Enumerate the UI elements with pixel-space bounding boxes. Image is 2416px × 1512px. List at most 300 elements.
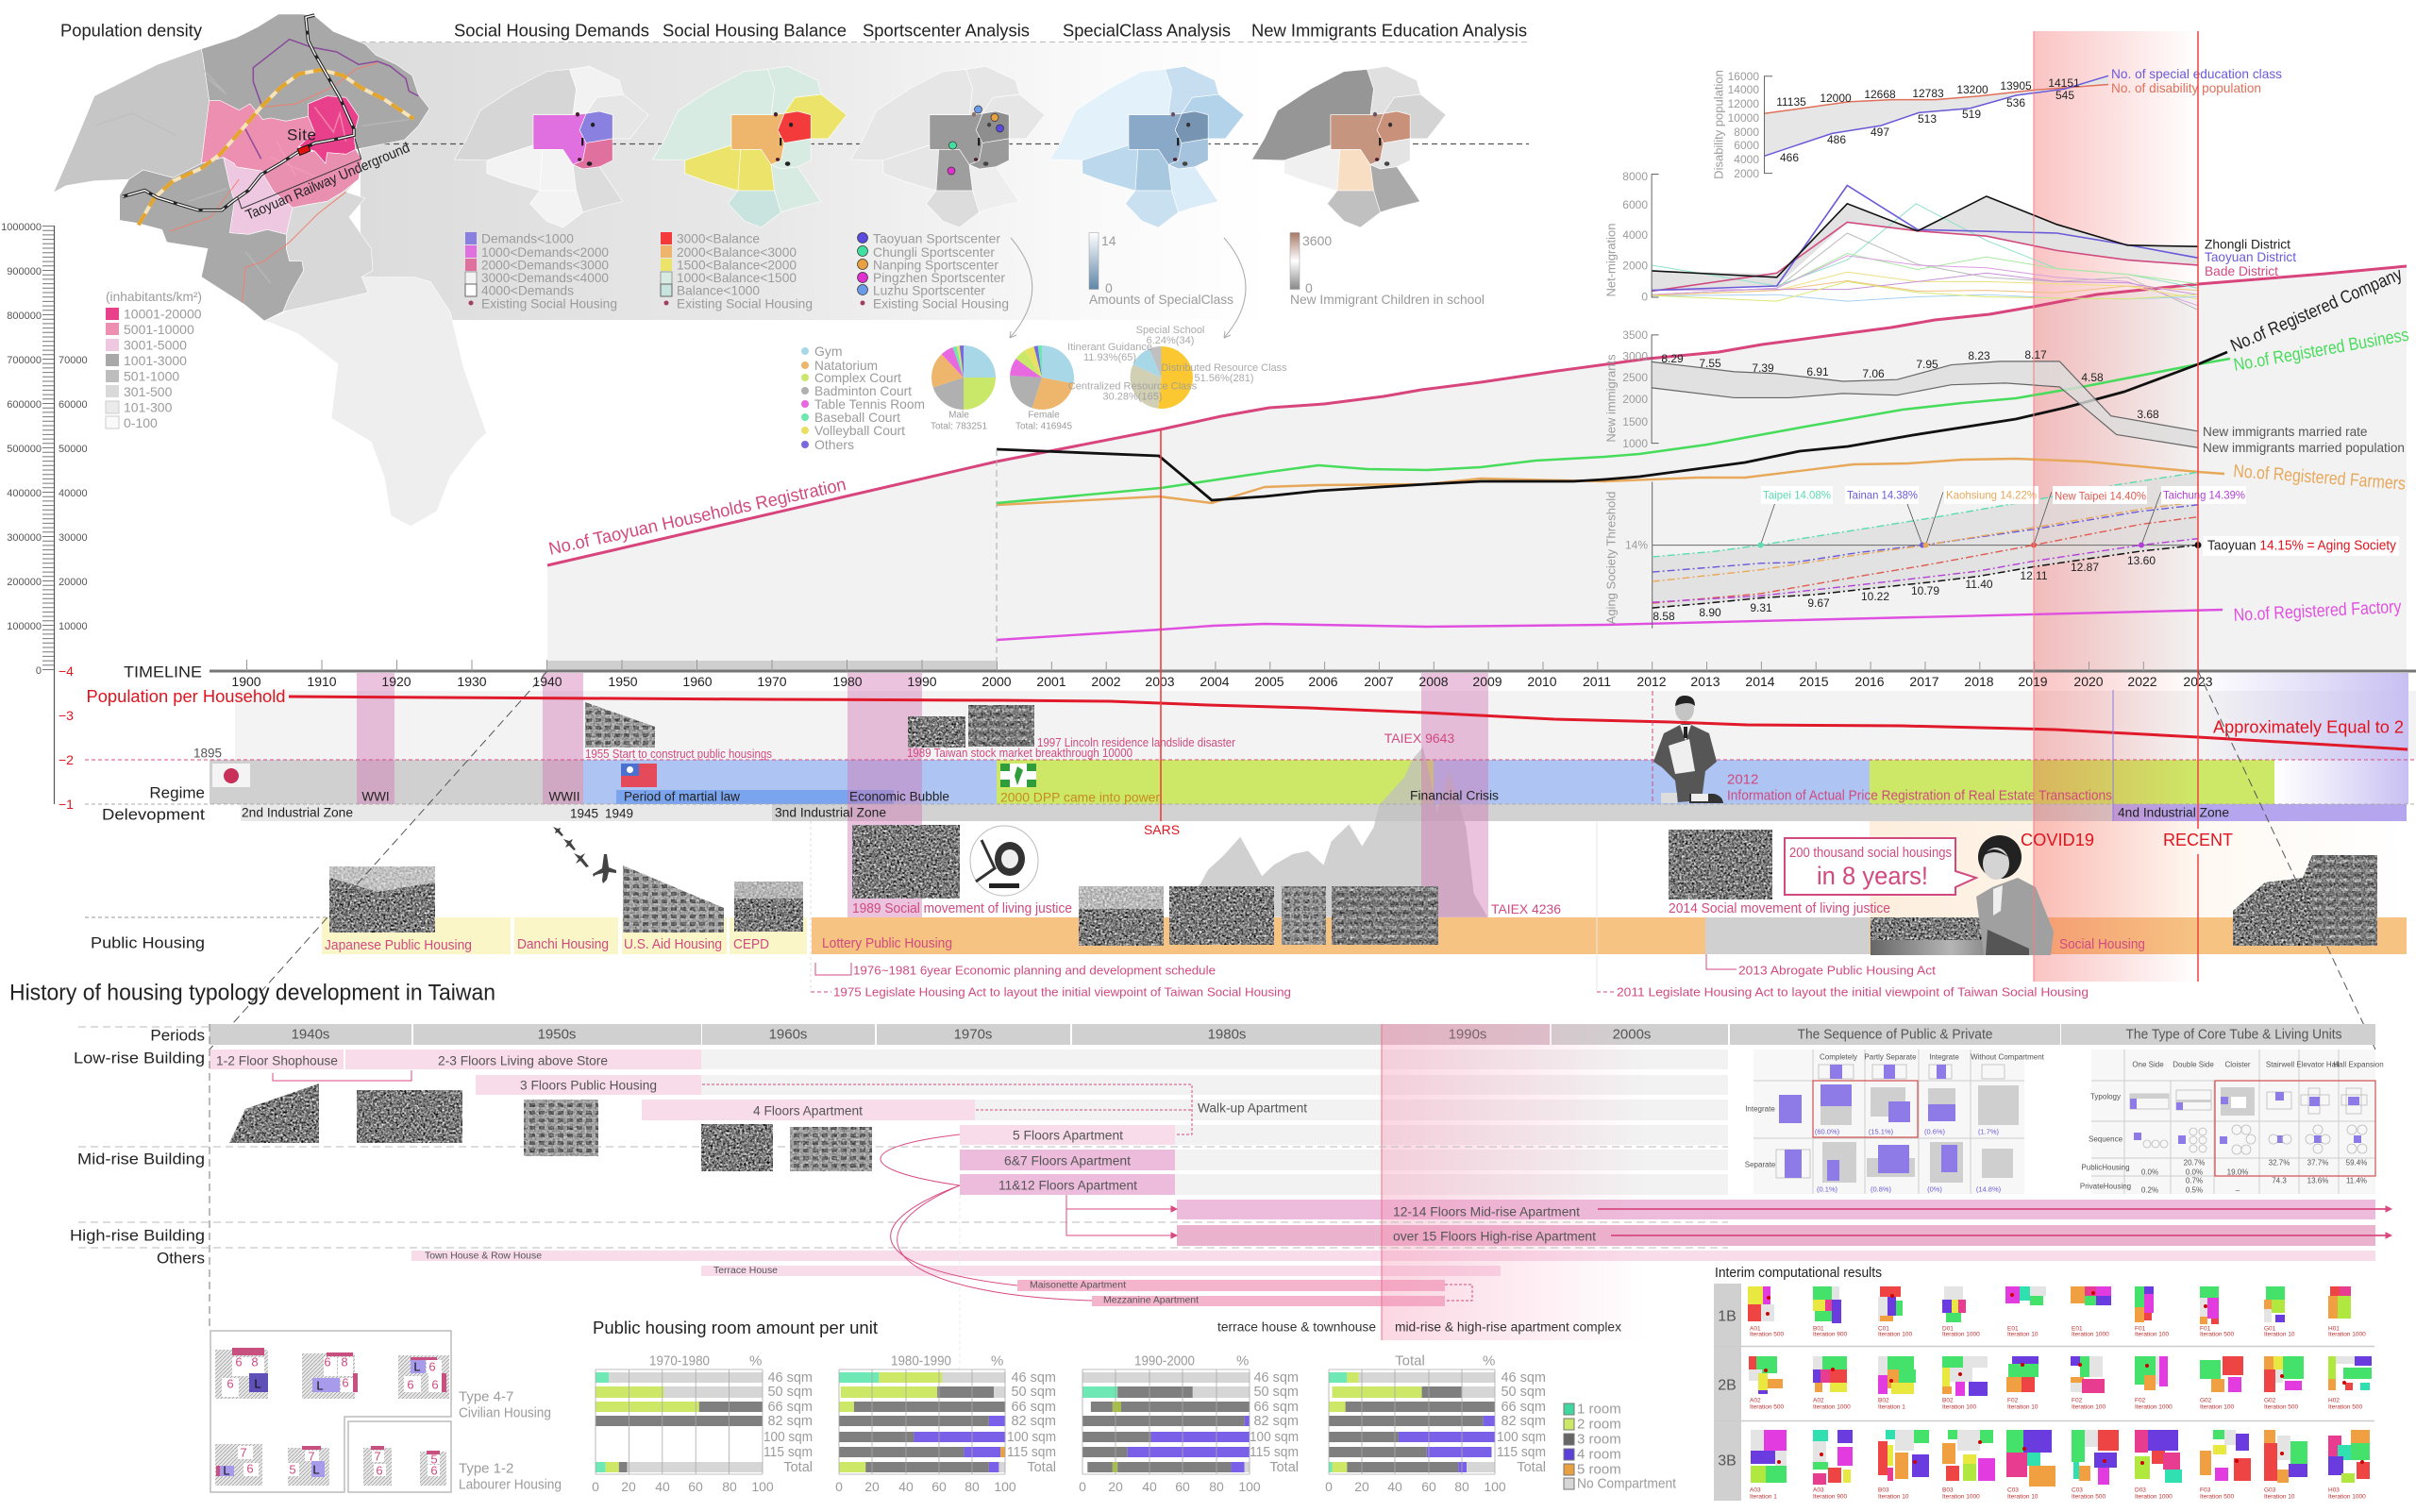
table: core tube and living units: 0.7% [2186,1176,2203,1185]
chart: aging society threshold: 10.79 [1911,584,1939,597]
row labels: Public Housing [91,934,205,951]
bar chart: total: 46 sqm [1501,1370,1546,1386]
public housing labels [325,901,2145,953]
left value axes: 40000 [59,488,88,499]
results captions: Iteration 1000 [1942,1493,1980,1501]
legend: demands [465,230,617,311]
legend: population density: 0-100 [124,415,158,430]
table: core tube and living units: Typology [2090,1093,2121,1100]
results captions: H01 [2328,1325,2340,1333]
bar chart: 1990-2000: 50 sqm [1253,1385,1299,1400]
chart: net migration: 6000 [1622,198,1648,211]
regime and period annotations: WWI [361,789,390,804]
pie: male: Male [948,410,969,421]
floor plan type labels: Civilian Housing [459,1404,551,1421]
chart: net migration: 4000 [1622,228,1648,242]
map: population density of Taoyuan: Site [287,126,316,143]
bar chart: 1970-1980: 100 sqm [763,1430,813,1445]
results captions: H02 [2328,1397,2340,1404]
results captions: Iteration 100 [2135,1331,2170,1338]
icon: ROC flag [621,764,657,787]
timeline axis: 2023 [2183,674,2213,689]
perspective zoom dashed lines [210,671,2375,1050]
bar chart: 1980-1990: % [991,1353,1003,1369]
results captions: Iteration 10 [2264,1331,2295,1338]
left value axes: 70000 [59,355,88,366]
chart: disability population: 13905 [2000,79,2032,92]
photo: recent social housing building [2233,855,2377,946]
results row 3B [1751,1430,2370,1487]
public housing labels: U.S. Aid Housing [624,937,722,952]
chart: disability population: 6000 [1734,139,1759,152]
titles of map analyses [60,21,1527,40]
dashed start of detailed data [996,449,998,671]
floor plan type labels: Type 4-7 [459,1389,513,1404]
plan room numbers: 6 [376,1463,383,1478]
chart: disability population: 10000 [1728,111,1759,125]
plan room numbers: 6 [428,1359,436,1374]
table: sequence of public and private: (14.8%) [1976,1185,2002,1193]
legend: rooms [1564,1401,1677,1491]
left value axes [1,222,88,804]
band: pale social housing era [1870,821,2408,917]
plan room numbers: 6 [430,1463,438,1478]
plan room numbers: 5 [430,1452,438,1467]
legend: sportscenters: Luzhu Sportscenter [873,283,985,298]
legend: sportscenters: Pingzhen Sportscenter [873,270,1005,285]
heading: room amount charts: Public housing room amount per unit [593,1319,878,1337]
bar chart: total: 82 sqm [1501,1414,1546,1429]
bar chart: 1980-1990: 80 [965,1479,980,1494]
bar chart: 1970-1980: 0 [592,1479,599,1494]
bar chart: 1970-1980: 100 [751,1479,774,1494]
rotated series labels [547,264,2410,626]
results captions [1750,1325,2366,1501]
typology bar labels: terrace house & townhouse [1217,1319,1376,1335]
plan room numbers: L [223,1463,230,1478]
chart: new immigrants: New immigrants married population [2203,440,2405,455]
plan room numbers: 6 [235,1355,243,1369]
bar chart: 1980-1990: 66 sqm [1011,1400,1056,1415]
bar chart: 1970-1980: 40 [655,1479,670,1494]
bar chart: 1990-2000: % [1236,1353,1249,1369]
panel: interim computational results: 1B [1718,1308,1736,1325]
public housing labels: Danchi Housing [517,937,609,952]
timeline axis: 1930 [457,674,487,689]
typology row labels [70,1027,205,1267]
typology row labels: High-rise Building [70,1227,205,1244]
bar chart: 1980-1990: 115 sqm [1007,1445,1056,1460]
chart: disability population: 497 [1871,126,1889,139]
legend: population density: 1001-3000 [124,353,187,368]
titles of map analyses: Sportscenter Analysis [863,21,1030,40]
band: lavender fade at recent end [2198,673,2408,760]
bar chart: 1980-1990: 1980-1990 [891,1353,951,1369]
results captions: Iteration 500 [1750,1331,1785,1338]
main line chart [547,266,2407,640]
results row 2B [1749,1356,2372,1396]
timeline axis: 2004 [1200,674,1230,689]
chart: new immigrants: 2500 [1622,371,1648,384]
titles of map analyses: SpecialClass Analysis [1063,21,1231,40]
legend: immigrant children gradient: New Immigrant Children in school [1290,292,1485,307]
chart background under households line [547,266,2407,671]
chart: new immigrants: 2000 [1622,393,1648,406]
plan room numbers [223,1355,439,1478]
left value axes: 30000 [59,532,88,544]
results captions: F03 [2200,1487,2211,1493]
table: sequence of public and private: (0.6%) [1924,1127,1946,1136]
timeline axis: 2022 [2127,674,2157,689]
regime and period annotations: Period of martial law [624,789,740,804]
bar chart: 1980-1990: 46 sqm [1011,1370,1056,1386]
results captions: A03 [1813,1487,1824,1493]
bar chart: 1980-1990: Total [1027,1460,1056,1475]
COVID and recent markers [2021,31,2233,982]
pie: special education classes: Centralized Resource Class [1068,381,1198,393]
chart: disability population: 13200 [1956,83,1988,96]
chart: new immigrants: 7.06 [1862,367,1885,380]
photo: 2012 president figure [1653,691,1723,803]
COVID and recent markers: COVID19 [2021,831,2094,849]
bar chart: 1970-1980: 20 [621,1479,636,1494]
photos: typology examples [229,1084,872,1171]
table: core tube and living units: PrivateHousing [2080,1182,2131,1191]
chart: new immigrants: 3500 [1622,328,1648,342]
chart: disability population: 536 [2006,96,2025,109]
results captions: B02 [1942,1397,1954,1404]
legend: sportscenters [857,230,1009,311]
typology row labels: Mid-rise Building [77,1150,205,1168]
bar chart: total: 66 sqm [1501,1400,1546,1415]
chart: aging society threshold: 12.87 [2071,561,2099,574]
pie: male [931,345,996,432]
results captions: A02 [1813,1397,1824,1404]
chart: new immigrants: New immigrants [1604,354,1618,443]
row labels: Regime [149,783,205,802]
heading: housing typology history: History of housing typology development in Taiwan [9,980,495,1006]
results captions: A01 [1750,1325,1761,1333]
COVID and recent markers: RECENT [2163,831,2233,849]
timeline axis: 2019 [2018,674,2048,689]
plan room numbers: 6 [342,1376,349,1389]
legend: sportscenters: Taoyuan Sportscenter [873,230,1000,245]
site marker [297,145,310,155]
legend: demands: Existing Social Housing [481,296,617,311]
legend: population density: (inhabitants/km²) [106,289,202,304]
event bands: wars and crises [357,673,1488,917]
chart: disability population: 12000 [1728,97,1759,110]
results captions: Iteration 500 [2072,1493,2106,1501]
chart: disability population: 14000 [1728,83,1759,96]
bar chart: 1990-2000: 40 [1142,1479,1157,1494]
legend: sports facilities [801,344,925,452]
bar chart: total: 40 [1387,1479,1402,1494]
results captions: Iteration 500 [2200,1331,2235,1338]
legend: immigrant children gradient: 0 [1305,280,1313,295]
event notes above regime band: 1989 Taiwan stock market breakthrough 10000 [907,747,1132,760]
timeline axis: 2000 [982,674,1012,689]
pie: special education classes: Distributed Resource Class [1161,362,1287,374]
pie: special education classes: 11.93%(65) [1083,352,1136,363]
bar chart: 1970-1980: 66 sqm [767,1400,813,1415]
legend: balance: 1000<Balance<1500 [677,270,797,285]
aging callouts: Taichung 14.39% [2163,489,2245,502]
regime and period annotations: Financial Crisis [1410,789,1499,802]
policy notes under timeline [811,821,2089,999]
bar chart: 1980-1990: 82 sqm [1011,1414,1056,1429]
typology bar labels: 3 Floors Public Housing [520,1078,657,1093]
typology row labels: Periods [150,1027,205,1044]
table: core tube and living units: 0.5% [2186,1185,2203,1195]
plan room numbers: L [254,1376,261,1391]
bar chart: 1980-1990: 0 [835,1479,843,1494]
event notes above regime band: 1955 Start to construct public housings [585,748,772,761]
typology bar labels: 5 Floors Apartment [1013,1129,1123,1142]
timeline axis: 1990 [907,674,937,689]
1990s highlight band [1382,1024,1646,1340]
results captions: F02 [2007,1397,2019,1404]
legend: sports facilities: Volleyball Court [814,423,905,438]
typology period header: The Type of Core Tube & Living Units [2125,1027,2342,1042]
table: sequence of public and private: Without Compartment [1971,1053,2045,1061]
legend: sports facilities: Natatorium [814,358,878,373]
regime and period annotations: WWII [549,789,579,804]
results captions: A02 [1750,1397,1761,1404]
population per household axis [59,664,74,812]
public housing labels: Social Housing [2059,937,2145,952]
bar chart: total: 115 sqm [1497,1445,1546,1460]
typology period header: 1950s [538,1027,576,1042]
chart: new immigrants: New immigrants married rate [2203,424,2368,439]
typology period header [210,1024,2375,1045]
chart: disability population: 2000 [1734,167,1759,180]
bar chart: 1980-1990: 100 sqm [1007,1430,1056,1445]
results captions: Iteration 100 [1942,1404,1977,1410]
chart: disability population: 12783 [1912,87,1944,100]
timeline axis: 2011 [1583,674,1611,689]
pie: female [1010,345,1074,432]
chart: aging society threshold: 12.11 [2020,569,2048,582]
bar chart: 1980-1990: 20 [864,1479,880,1494]
plan room numbers: 5 [289,1463,296,1476]
bar chart: total: Total [1395,1353,1425,1369]
timeline axis: 1920 [381,674,411,689]
population per household line: Approximately Equal to 2 [2213,717,2404,736]
chart: new immigrants: 7.39 [1752,361,1774,375]
bar chart: total: % [1483,1353,1495,1369]
results captions: D03 [2135,1487,2146,1493]
bar chart: 1970-1980: 115 sqm [763,1445,813,1460]
legend: rooms: 5 room [1577,1461,1621,1478]
plan room numbers: 8 [251,1355,259,1369]
left value axes: 1000000 [1,222,42,233]
legend: demands: 4000<Demands [481,283,574,298]
regime and period annotations: 3nd Industrial Zone [775,806,886,819]
chart: disability population: 466 [1780,151,1799,164]
icon: DPP flag [1000,764,1036,787]
results captions: Iteration 100 [2200,1404,2235,1410]
pie: special education classes: 30.28%(165) [1102,391,1163,402]
legend: population density: 101-300 [124,400,173,415]
timeline axis: 1950 [608,674,638,689]
chart: net migration: 0 [1641,291,1648,304]
plan room numbers: 6 [246,1461,254,1476]
legend: special class gradient [1089,232,1233,307]
public housing labels: Japanese Public Housing [325,938,472,953]
results captions: Iteration 1000 [2328,1493,2366,1501]
typology bar labels: over 15 Floors High-rise Apartment [1393,1229,1596,1244]
floor plan type labels: Type 1-2 [459,1461,513,1476]
pie: special education classes: 51.56%(281) [1195,373,1253,384]
pie: special education classes [1067,325,1287,409]
icon: Japanese flag [212,764,250,787]
public housing labels: CEPD [733,937,769,952]
map: special class analysis [1049,66,1244,227]
legend: population density: 301-500 [124,384,173,399]
map: population density of Taoyuan: Taoyuan Railway Underground [243,140,412,224]
legend: demands: Demands<1000 [481,230,574,245]
panel: interim computational results [1714,1266,2374,1501]
timeline axis: 2007 [1364,674,1394,689]
timeline axis: 2012 [1636,674,1667,689]
callout: 200 thousand social housings: in 8 years! [1817,862,1928,890]
population per household line [87,687,2408,749]
typology bar labels: mid-rise & high-rise apartment complex [1395,1319,1621,1335]
chart: new immigrants: 3000 [1622,349,1648,362]
results captions: Iteration 1000 [1942,1331,1980,1338]
results captions: C03 [2072,1487,2083,1493]
legend: demands: 3000<Demands<4000 [481,270,609,285]
chart: new immigrants: 7.95 [1916,358,1938,371]
table: core tube and living units: – [2236,1185,2240,1195]
results captions: G02 [2264,1397,2276,1404]
legend: sports facilities: Others [814,437,854,452]
plans in civilian housing [215,1348,449,1399]
plan room numbers: 7 [308,1450,315,1463]
bar chart: total: Total [1517,1460,1546,1475]
panel: spatial analysis background [361,42,1527,320]
registered company line [997,352,2227,500]
plan room numbers: L [413,1359,421,1374]
legend: population density [106,289,202,430]
map: social housing demands [454,66,648,227]
chart: new immigrants: 1000 [1622,437,1648,450]
bar chart: total: 0 [1325,1479,1333,1494]
table: sequence of public and private: (60.0%) [1815,1127,1840,1136]
results captions: Iteration 10 [2007,1493,2038,1501]
bar chart: 1990-2000: 66 sqm [1253,1400,1299,1415]
bar chart: 1970-1980 [592,1353,813,1494]
map: social housing balance [652,66,847,227]
typology period header: 1940s [292,1027,329,1042]
row labels [91,783,205,951]
results captions: G01 [2264,1325,2276,1333]
left value axes: 500000 [7,444,42,455]
map: sportscenter analysis [850,66,1045,227]
2012 price registration note: 2012 [1727,772,1758,787]
registered business line [997,359,2230,503]
chart: disability population: Disability population [1712,70,1725,179]
table: core tube and living units: PublicHousing [2081,1163,2130,1172]
arrow: special class to pie [1224,238,1246,338]
photo: 2014 social movement: 2014 Social movement of living justice [1669,901,1890,916]
legend: population density: 10001-20000 [124,306,202,321]
chart: disability population [1712,66,2282,180]
legend: balance: 1500<Balance<2000 [677,257,797,272]
bar chart: 1980-1990: 50 sqm [1011,1385,1056,1400]
results captions: Iteration 900 [1813,1493,1848,1501]
typology row labels: Low-rise Building [74,1050,205,1067]
floor plan type labels: Labourer Housing [459,1476,562,1493]
results captions: B02 [1878,1397,1889,1404]
photos: public housing history [329,825,1438,946]
event notes above regime band: TAIEX 4236 [1491,901,1561,916]
timeline axis: 2016 [1854,674,1885,689]
table: core tube and living units: 32.7% [2269,1159,2290,1167]
legend: rooms: 3 room [1577,1431,1621,1448]
households line [547,266,2407,565]
table: core tube and living units: Elevator Hall [2296,1061,2340,1068]
chart: disability population: 519 [1962,108,1981,121]
chart: disability population: 12668 [1864,88,1896,101]
registered farmers line [997,459,2224,505]
timeline axis: 2014 [1745,674,1775,689]
chart: aging society threshold: Aging Society Threshold [1604,492,1618,624]
typology bar labels [216,1053,1621,1335]
typology bar labels: Mezzanine Apartment [1103,1295,1199,1306]
results captions: Iteration 100 [2072,1404,2106,1410]
results captions: G03 [2264,1487,2276,1493]
typology bar labels: 4 Floors Apartment [753,1104,863,1117]
event notes above regime band [585,731,1561,916]
chart: disability population: 8000 [1734,126,1759,139]
map: population density of Taoyuan [54,14,487,527]
panel: interim computational results: 3B [1718,1453,1736,1469]
bar chart: total: 80 [1454,1479,1469,1494]
legend: sports facilities: Gym [814,344,843,359]
legend: rooms: 4 room [1577,1446,1621,1463]
table: sequence of public and private: (0.1%) [1817,1185,1838,1193]
population per household axis: −2 [59,752,74,767]
chart: net migration: 2000 [1622,259,1648,272]
results captions: E01 [2072,1325,2083,1333]
plan room numbers: L [316,1378,324,1393]
bar chart: total: 100 [1484,1479,1506,1494]
legend: balance: 3000<Balance [677,230,760,245]
arrow: sports to pie [1010,238,1032,338]
typology bar labels: Terrace House [713,1266,778,1276]
typology bar labels: 6&7 Floors Apartment [1004,1153,1131,1168]
legend: balance [661,230,813,311]
policy notes under timeline: 1975 Legislate Housing Act to layout the initial viewpoint of Taiwan Social Housing [833,985,1291,999]
bar chart: 1990-2000: 60 [1175,1479,1190,1494]
regime and period annotations: 2nd Industrial Zone [242,806,353,819]
results captions: Iteration 500 [1750,1404,1785,1410]
panel: public housing floor plans [210,1331,451,1492]
plan room numbers: 6 [431,1378,439,1391]
bar chart: 1970-1980: 80 [722,1479,737,1494]
chart: new immigrants: 8.29 [1661,352,1684,365]
chart: aging society threshold: Taoyuan 14.15% = Aging Society [2207,538,2397,553]
results captions: F01 [2200,1325,2211,1333]
typology bar labels: Maisonette Apartment [1030,1280,1126,1291]
1990s marker line [1381,1024,1383,1340]
left value axes: 0 [36,665,42,677]
bar chart: 1970-1980: 60 [688,1479,703,1494]
table: core tube and living units: 20.7% [2184,1159,2205,1167]
pie: special education classes: Special School [1136,325,1204,336]
